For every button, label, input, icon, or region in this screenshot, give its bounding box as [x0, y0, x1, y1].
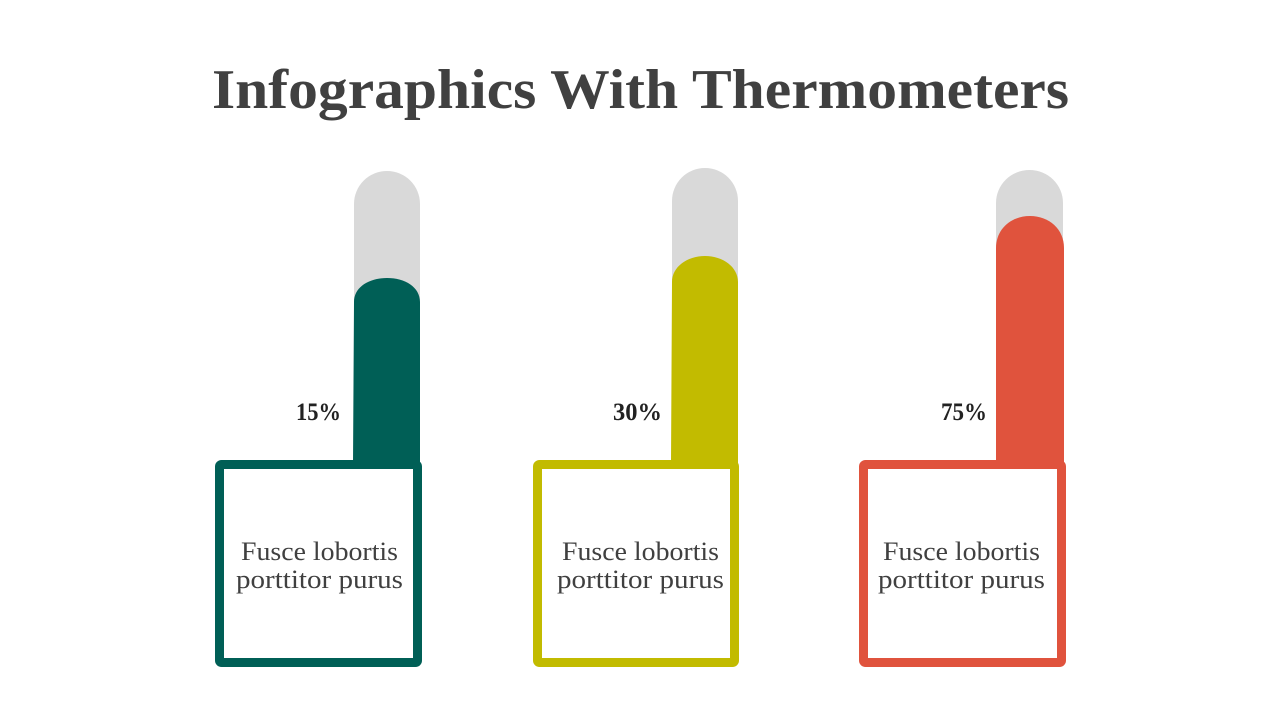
thermometer fill: yellow — [671, 256, 738, 464]
panel: thermometer 75% — [864, 170, 1064, 663]
panel: thermometer 15% — [220, 171, 420, 662]
percentage label: 15% — [296, 399, 341, 426]
panel: thermometer 30% — [538, 168, 738, 662]
text box — [220, 464, 418, 662]
box text: porttitor purus — [236, 565, 403, 594]
box text: Fusce lobortis — [241, 537, 398, 566]
percentage label: 75% — [941, 399, 987, 426]
text box — [538, 464, 734, 662]
thermometer fill: green — [353, 278, 420, 464]
thermometer tube: gray — [354, 171, 420, 304]
box text: Fusce lobortis — [562, 537, 719, 566]
percentage label: 30% — [613, 399, 662, 426]
box text: Fusce lobortis — [883, 537, 1040, 566]
thermometer tube: gray — [996, 170, 1063, 250]
thermometer fill: red — [996, 216, 1064, 464]
box text: porttitor purus — [878, 565, 1045, 594]
box text: porttitor purus — [557, 565, 724, 594]
thermometer tube: gray — [672, 168, 738, 284]
text box — [864, 464, 1062, 662]
title: Infographics With Thermometers — [212, 59, 1069, 121]
